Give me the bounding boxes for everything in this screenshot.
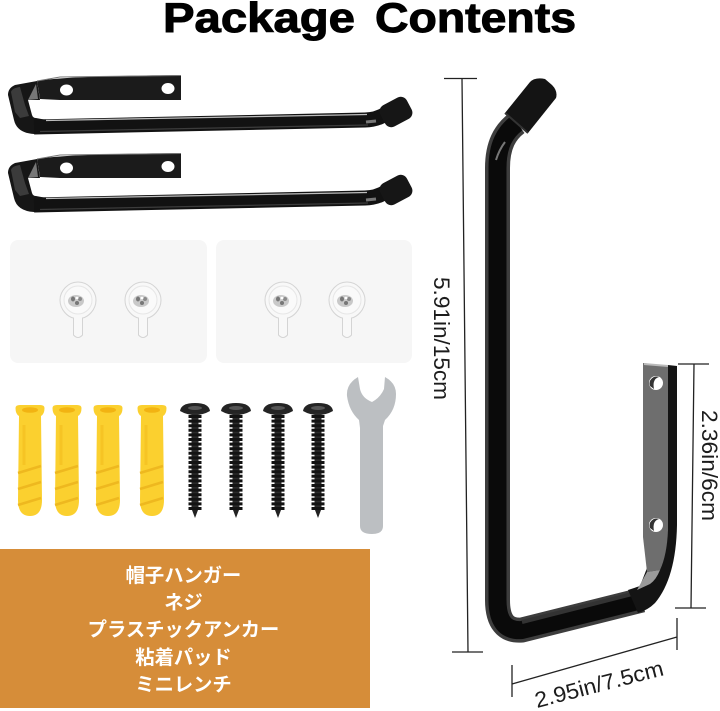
adhesive pad 1 (10, 240, 207, 363)
icon: small bracket 2 (8, 153, 415, 212)
adhesive pad 2 (216, 240, 412, 363)
dimension: 2.36in/6cm (675, 364, 720, 608)
orange label panel: 帽子ハンガー (126, 565, 241, 587)
orange label panel (0, 549, 370, 708)
plastic anchors (16, 405, 166, 516)
icon: small bracket 1 (8, 75, 415, 134)
dimension: 5.91in/15cm (429, 78, 483, 652)
title (163, 0, 576, 41)
orange label panel: ネジ (164, 592, 203, 614)
dimension: 5.91in/15cm: 5.91in/15cm (429, 277, 454, 400)
screws (180, 403, 333, 518)
orange label panel: 粘着パッド (135, 647, 232, 669)
orange label panel: プラスチックアンカー (88, 619, 279, 641)
orange label panel: ミニレンチ (135, 675, 232, 696)
large hook (496, 78, 677, 630)
icon: mini wrench (347, 377, 396, 534)
dimension: 2.95in/7.5cm (512, 618, 677, 711)
